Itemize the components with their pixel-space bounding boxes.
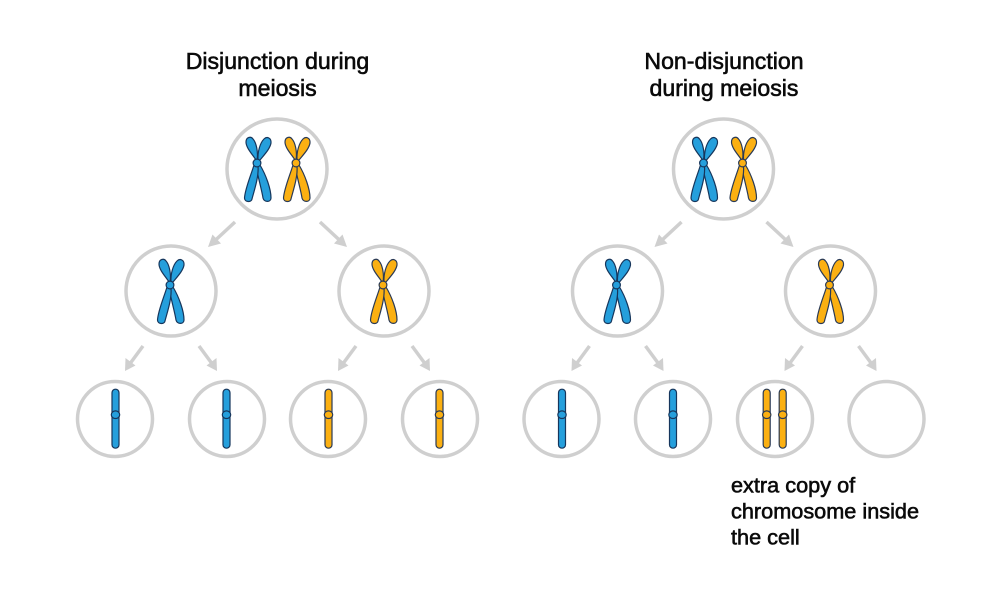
gamete: two yellow chromosomes bbox=[738, 382, 812, 456]
gamete: yellow 1 bbox=[290, 382, 366, 456]
arrow: to right daughter cell bbox=[320, 222, 347, 247]
gamete: blue 1 bbox=[524, 382, 599, 456]
arrow: blue cell right bbox=[199, 346, 217, 371]
second-stage cell: blue bbox=[126, 246, 216, 336]
arrow: yellow cell left bbox=[338, 346, 356, 371]
annotation: extra copy of chromosome: the cell bbox=[731, 524, 800, 550]
gamete: blue 1 bbox=[78, 382, 152, 456]
heading: non-disjunction: Non-disjunction bbox=[644, 48, 804, 74]
arrow: to right daughter cell bbox=[766, 222, 794, 247]
arrow: yellow cell right bbox=[858, 346, 876, 371]
gamete: yellow 2 bbox=[402, 382, 478, 456]
second-stage cell: blue bbox=[572, 246, 662, 336]
gamete: blue 2 bbox=[636, 382, 710, 456]
panel: disjunction during meiosis bbox=[78, 48, 478, 456]
heading: disjunction: meiosis bbox=[238, 75, 317, 101]
arrow: yellow cell left bbox=[784, 346, 802, 371]
panel: non-disjunction during meiosis bbox=[524, 48, 924, 550]
arrow: blue cell left bbox=[572, 346, 590, 371]
second-stage cell: yellow bbox=[786, 246, 876, 336]
arrow: blue cell left bbox=[125, 346, 143, 371]
arrow: to left daughter cell bbox=[654, 222, 682, 247]
heading: non-disjunction: during meiosis bbox=[650, 75, 798, 101]
second-stage cell: yellow bbox=[339, 246, 429, 336]
arrow: to left daughter cell bbox=[208, 222, 235, 247]
gamete: empty cell bbox=[849, 382, 924, 456]
annotation: extra copy of chromosome: chromosome inside bbox=[731, 498, 919, 524]
arrow: blue cell right bbox=[646, 346, 664, 371]
heading: disjunction: Disjunction during bbox=[186, 48, 369, 74]
annotation: extra copy of chromosome: extra copy of bbox=[731, 472, 856, 498]
parent cell with two chromosomes bbox=[227, 119, 327, 219]
arrow: yellow cell right bbox=[412, 346, 430, 371]
gamete: blue 2 bbox=[190, 382, 264, 456]
parent cell with two chromosomes bbox=[674, 119, 774, 219]
